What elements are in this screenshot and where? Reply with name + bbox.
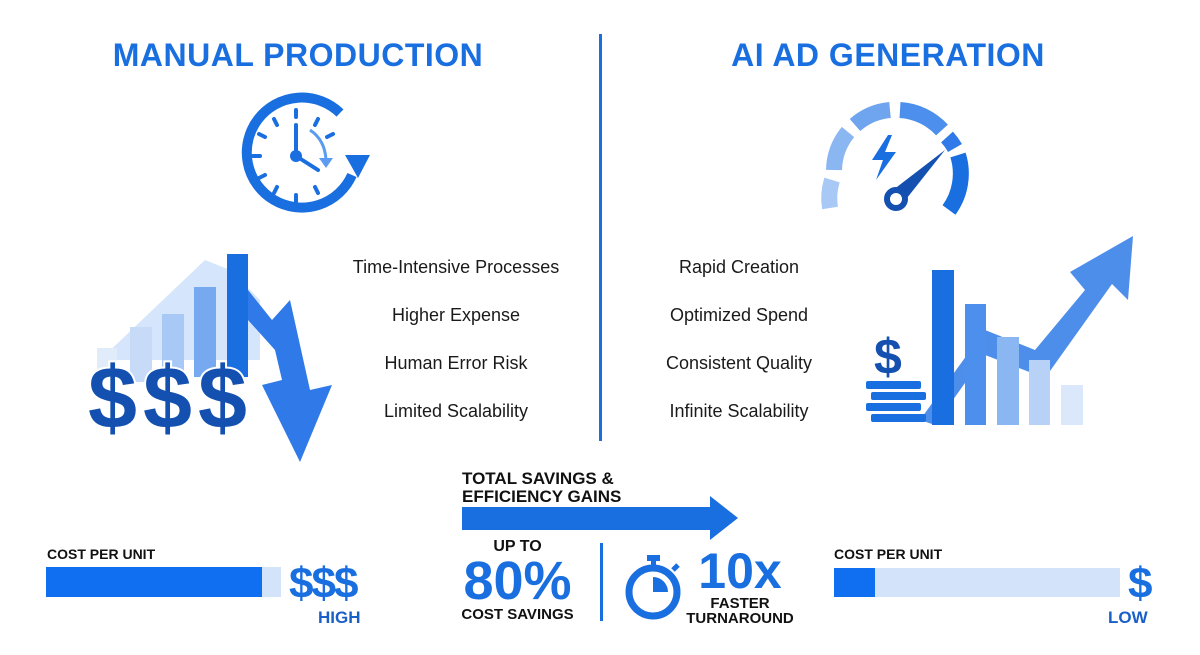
stat: 10x: [686, 543, 794, 627]
number: 80%: [463, 551, 572, 611]
savings header and arrow: [462, 469, 738, 540]
arrow: [462, 496, 738, 540]
chart: rising growth: [866, 236, 1133, 425]
bar: [834, 568, 1120, 597]
icon: speed gauge: [821, 102, 969, 215]
title: ai ad generation: AI AD GENERATION: [731, 37, 1045, 73]
item: Rapid Creation: [679, 257, 799, 277]
left cost bar: [46, 546, 360, 627]
stat: 80%: [461, 538, 574, 623]
item: Higher Expense: [392, 305, 520, 325]
HIGH: HIGH: [318, 608, 360, 627]
item: Consistent Quality: [666, 353, 812, 373]
list: ai benefits: [666, 257, 812, 421]
item: Time-Intensive Processes: [353, 257, 559, 277]
title: manual production: MANUAL PRODUCTION: [113, 37, 483, 73]
caption: FASTER: [710, 595, 770, 612]
label: COST PER UNIT: [834, 546, 942, 562]
heading: [462, 469, 621, 506]
chart: falling cost: $: [198, 348, 247, 447]
label: COST PER UNIT: [47, 546, 155, 562]
heading: TOTAL SAVINGS &: [462, 469, 614, 488]
caption: COST SAVINGS: [461, 606, 574, 623]
icon: stopwatch: [626, 555, 680, 620]
icon: clock: [242, 92, 370, 213]
number: 10x: [698, 543, 782, 599]
item: Optimized Spend: [670, 305, 808, 325]
bar: [46, 567, 281, 597]
chart: falling cost: $: [88, 348, 137, 447]
chart: falling cost: $: [143, 348, 192, 447]
chart: falling cost: [88, 254, 332, 462]
caption: TURNAROUND: [686, 610, 794, 627]
bottom divider: [600, 543, 603, 621]
chart: rising growth: $: [874, 329, 902, 385]
list: manual drawbacks: [353, 257, 559, 421]
center divider: [599, 34, 602, 441]
item: Limited Scalability: [384, 401, 528, 421]
up to: UP TO: [493, 538, 542, 555]
heading: EFFICIENCY GAINS: [462, 487, 621, 506]
caption: [686, 595, 794, 627]
right cost bar: [834, 546, 1152, 627]
$: $: [1128, 559, 1152, 608]
item: Human Error Risk: [384, 353, 528, 373]
$$$: $$$: [289, 559, 356, 608]
item: Infinite Scalability: [669, 401, 809, 421]
LOW: LOW: [1108, 608, 1148, 627]
